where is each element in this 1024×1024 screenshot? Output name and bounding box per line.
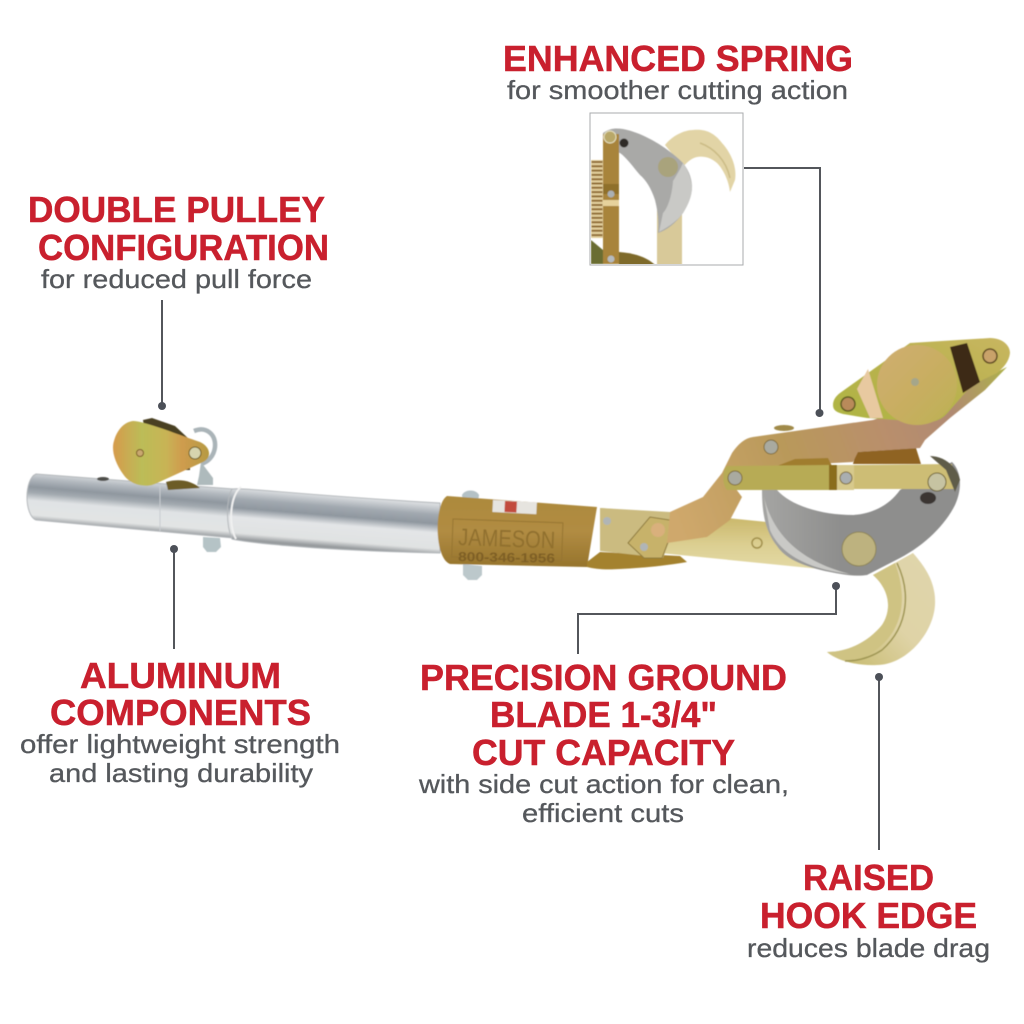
- eye bolt: [197, 462, 213, 485]
- arm rivet: [752, 538, 762, 548]
- gold collar with JAMESON label: 800-346-1956: [458, 549, 555, 566]
- bolts on the pole: [203, 490, 482, 580]
- lower arm: [600, 508, 830, 570]
- heading: blade line 1: PRECISION GROUND: [420, 657, 787, 698]
- gear teeth: [853, 448, 921, 464]
- hole in tube: [97, 477, 109, 481]
- bracket hex nut: [628, 517, 676, 558]
- inset photo: spring detail: [590, 113, 743, 265]
- callout: enhanced spring: [503, 38, 853, 105]
- callout: raised hook edge: [747, 857, 990, 963]
- blade: [762, 462, 960, 576]
- leader line: precision blade: [578, 582, 840, 654]
- callout: precision ground blade: [418, 657, 789, 828]
- brown strip under lever: [777, 458, 832, 466]
- heading: enhanced spring: ENHANCED SPRING: [503, 38, 853, 79]
- heading: blade line 3: CUT CAPACITY: [472, 732, 735, 773]
- callout: double pulley: [28, 189, 329, 294]
- wheel bottom on tube: [166, 480, 200, 490]
- collar scoop: [587, 552, 687, 569]
- subtext: aluminum line 1: offer lightweight strength: [20, 729, 340, 759]
- hook: [827, 553, 935, 665]
- small pulley assembly: [113, 418, 215, 490]
- hook inner band: [827, 563, 902, 661]
- rivets: [728, 425, 946, 491]
- blade pivot nut: [842, 532, 876, 566]
- gold collar with JAMESON label: JAMESON: [458, 524, 556, 554]
- subtext: aluminum line 2: and lasting durability: [49, 758, 313, 788]
- heading: hook line 1: RAISED: [803, 857, 934, 898]
- heading: aluminum line 2: COMPONENTS: [50, 692, 311, 733]
- subtext: double pulley: for reduced pull force: [41, 264, 312, 294]
- callout: aluminum components: [20, 655, 340, 788]
- aluminum tube: outer: [27, 474, 233, 538]
- pulley wheel behind plate: [143, 418, 190, 470]
- leader line: enhanced spring: [744, 168, 824, 417]
- leader line: raised hook: [875, 673, 883, 850]
- leader line: aluminum components: [170, 545, 178, 649]
- large pulley plate: [833, 338, 1010, 425]
- upper lever: [667, 367, 1007, 543]
- heading: hook line 2: HOOK EDGE: [760, 895, 977, 936]
- blade hole: [920, 492, 936, 504]
- heading: double pulley line 2: CONFIGURATION: [38, 227, 329, 268]
- subtext: blade line 2: efficient cuts: [522, 798, 684, 828]
- hook ridge: [845, 563, 905, 661]
- subtext: hook: reduces blade drag: [747, 933, 990, 963]
- shackle ring: [194, 429, 215, 464]
- heading: aluminum line 1: ALUMINUM: [80, 655, 281, 696]
- tube seam: [159, 484, 161, 531]
- subtext: enhanced spring: for smoother cutting action: [507, 75, 848, 105]
- gold collar with JAMESON label: [438, 496, 687, 569]
- product: pole pruner tool: [27, 338, 1010, 665]
- heading: blade line 2: BLADE 1-3/4": [490, 694, 717, 735]
- pulley plate: [113, 421, 209, 486]
- heading: double pulley line 1: DOUBLE PULLEY: [28, 189, 325, 230]
- tube joint highlight: [231, 487, 241, 539]
- leader line: double pulley: [158, 300, 166, 410]
- subtext: blade line 1: with side cut action for clean,: [418, 769, 789, 799]
- aluminum tube: inner: [228, 489, 440, 553]
- link bar: [723, 456, 960, 492]
- bracket plate: [600, 508, 677, 558]
- blade ground edge: [764, 497, 850, 574]
